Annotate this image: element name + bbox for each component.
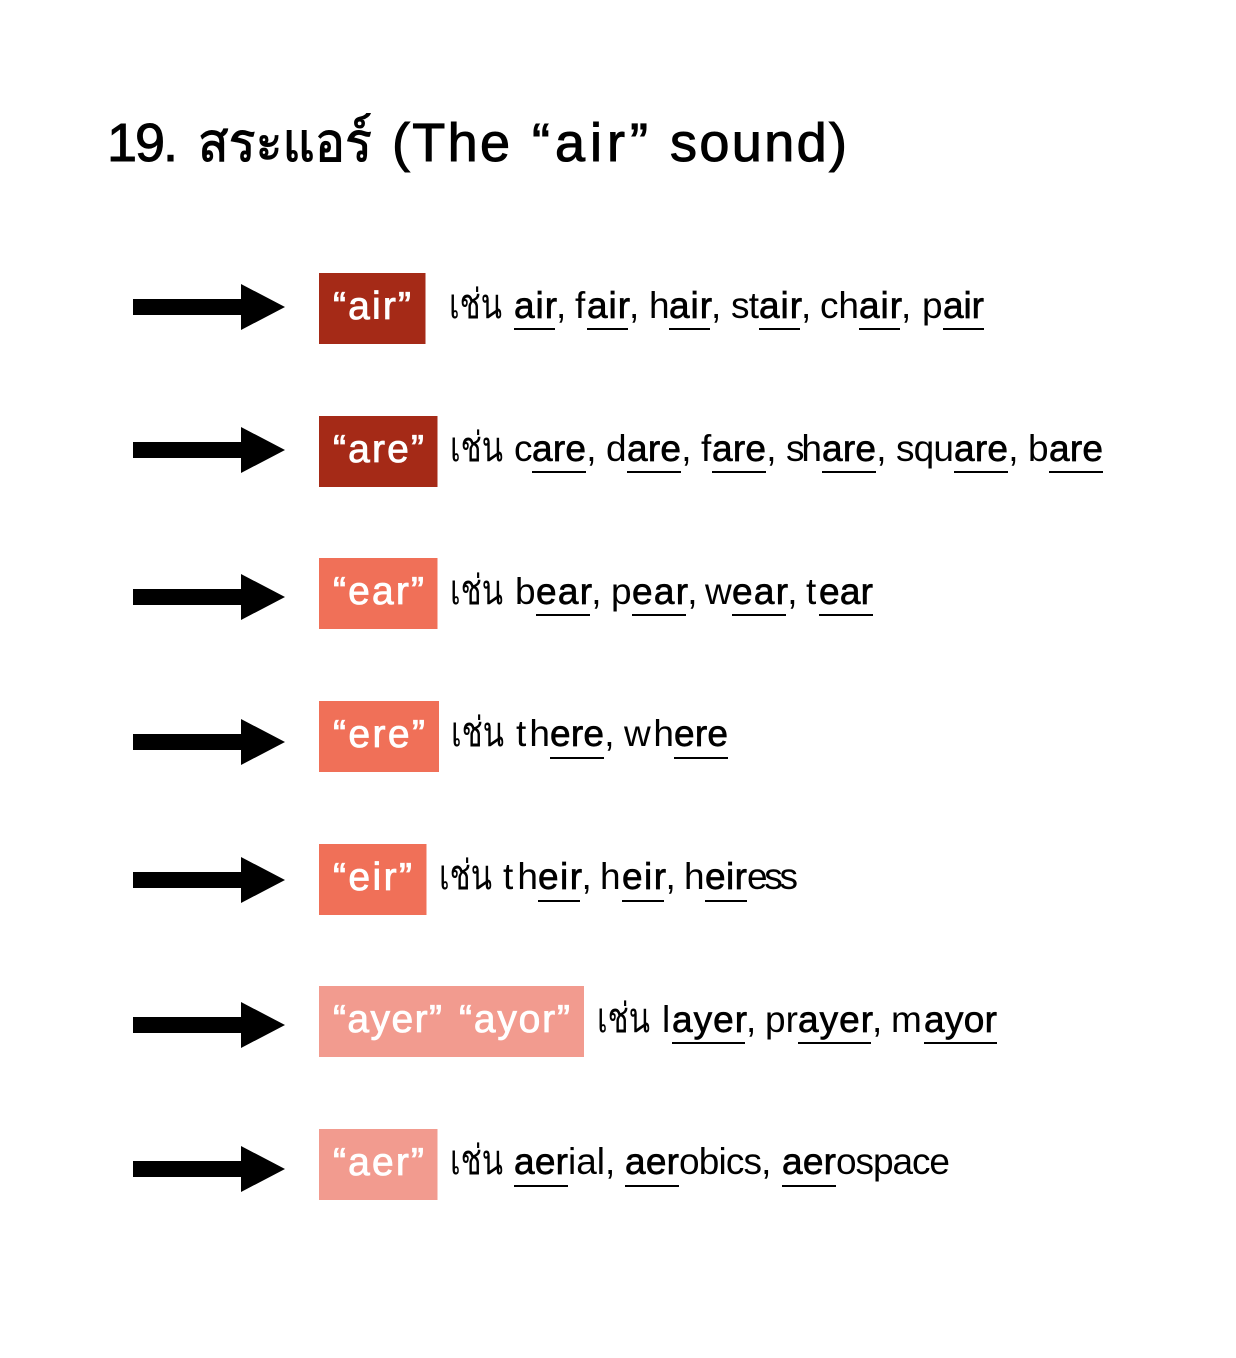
label: ayer ayor: “ayor” xyxy=(459,998,570,1041)
examples: air: air xyxy=(859,285,902,326)
examples: aer xyxy=(450,1137,950,1187)
examples: ear: , xyxy=(787,571,798,612)
examples: air: , xyxy=(801,285,811,326)
examples: ear: ear xyxy=(632,571,688,612)
row: ayer ayor xyxy=(133,986,997,1057)
examples: are: are xyxy=(532,428,586,469)
examples: air: f xyxy=(575,285,586,326)
examples: air: เช่น xyxy=(449,281,502,327)
examples: are: f xyxy=(701,428,712,469)
examples: ere xyxy=(451,709,728,759)
examples: ayer ayor: pr xyxy=(765,999,798,1040)
label: ere xyxy=(319,701,439,772)
examples: air: air xyxy=(759,285,802,326)
arrow: air xyxy=(133,284,285,330)
label: eir: “eir” xyxy=(333,856,412,899)
examples: are: b xyxy=(1028,428,1049,469)
examples: ere: เช่น xyxy=(451,709,504,755)
examples: aer: aer xyxy=(625,1141,679,1182)
examples: air: air xyxy=(514,285,557,326)
examples: ayer ayor: , xyxy=(746,999,756,1040)
examples: ayer ayor xyxy=(597,995,997,1044)
examples: air: , xyxy=(629,285,639,326)
examples: are: are xyxy=(822,428,876,469)
arrow: are xyxy=(133,427,285,473)
examples: air: p xyxy=(922,285,943,326)
examples: air xyxy=(449,281,984,330)
examples: ayer ayor: เช่น xyxy=(597,995,650,1041)
examples: eir: , xyxy=(665,856,676,897)
examples: ayer ayor: ayer xyxy=(672,999,747,1040)
label: ear xyxy=(319,558,438,629)
examples: are: squ xyxy=(896,428,954,469)
examples: aer: ospace xyxy=(836,1141,950,1182)
examples: are xyxy=(450,424,1103,473)
examples: are: c xyxy=(514,428,532,469)
examples: ear: เช่น xyxy=(450,567,503,613)
label: eir xyxy=(319,844,426,915)
examples: are: เช่น xyxy=(450,424,503,470)
label: air xyxy=(319,273,426,344)
row: air xyxy=(133,273,984,344)
examples: air: ch xyxy=(820,285,859,326)
examples: are: sh xyxy=(786,428,822,469)
examples: ear: ear xyxy=(536,571,592,612)
row: eir xyxy=(133,844,798,915)
examples: are: d xyxy=(606,428,627,469)
examples: are: are xyxy=(954,428,1008,469)
label: ayer ayor: “ayer” xyxy=(333,998,442,1041)
examples: are: , xyxy=(766,428,777,469)
arrow: eir xyxy=(133,857,285,903)
label: ear: “ear” xyxy=(333,570,424,613)
examples: ear: w xyxy=(704,571,732,612)
examples: air: h xyxy=(649,285,670,326)
examples: eir: h xyxy=(684,856,705,897)
arrow: ere xyxy=(133,719,285,765)
examples: aer: aer xyxy=(782,1141,836,1182)
row: are xyxy=(133,416,1103,487)
examples: ayer ayor: m xyxy=(891,999,922,1040)
examples: eir xyxy=(439,852,798,902)
examples: eir: ess xyxy=(747,856,798,897)
arrow: ayer ayor xyxy=(133,1002,285,1048)
examples: ear: ear xyxy=(819,571,873,612)
examples: eir: เช่น xyxy=(439,852,492,898)
examples: eir: eir xyxy=(538,856,582,897)
examples: air: , xyxy=(901,285,911,326)
label: aer xyxy=(319,1129,438,1200)
examples: aer: , xyxy=(761,1141,771,1182)
examples: ear: ear xyxy=(732,571,788,612)
examples: are: , xyxy=(586,428,597,469)
arrow: aer xyxy=(133,1146,285,1192)
title: สระแอร์ xyxy=(198,113,372,173)
examples: ere: , xyxy=(604,713,615,754)
examples: eir: th xyxy=(503,856,538,897)
row: aer xyxy=(133,1129,950,1200)
examples: air: air xyxy=(943,285,984,326)
title: sound) xyxy=(670,113,847,173)
examples: ayer ayor: ayer xyxy=(798,999,873,1040)
examples: are: , xyxy=(681,428,692,469)
row: ere xyxy=(133,701,728,772)
examples: are: , xyxy=(876,428,887,469)
label: air: “air” xyxy=(333,285,411,328)
title: “air” xyxy=(532,113,648,173)
title: (The xyxy=(392,113,510,173)
examples: ayer ayor: ayor xyxy=(924,999,997,1040)
examples: air: , xyxy=(556,285,566,326)
examples: ear: b xyxy=(515,571,536,612)
title: 19. xyxy=(107,113,178,173)
examples: eir: eir xyxy=(622,856,666,897)
examples: aer: เช่น xyxy=(450,1137,503,1183)
label: ayer ayor xyxy=(319,986,584,1057)
examples: aer: aer xyxy=(514,1141,568,1182)
examples: ere: th xyxy=(516,713,550,754)
examples: are: are xyxy=(1049,428,1103,469)
examples: ayer ayor: , xyxy=(872,999,882,1040)
examples: ere: ere xyxy=(550,713,604,754)
label: aer: “aer” xyxy=(333,1141,424,1184)
examples: air: air xyxy=(669,285,712,326)
examples: ear: t xyxy=(806,571,817,612)
examples: eir: h xyxy=(600,856,621,897)
examples: are: are xyxy=(627,428,681,469)
label: are xyxy=(319,416,438,487)
examples: air: , xyxy=(711,285,721,326)
label: ere: “ere” xyxy=(333,713,425,756)
examples: air: st xyxy=(731,285,760,326)
examples: eir: , xyxy=(581,856,592,897)
examples: ear: , xyxy=(591,571,602,612)
examples: are: , xyxy=(1008,428,1019,469)
examples: air: air xyxy=(587,285,630,326)
examples: ere: wh xyxy=(623,713,674,754)
examples: are: are xyxy=(712,428,766,469)
examples: aer: , xyxy=(605,1141,615,1182)
row: ear xyxy=(133,558,873,629)
examples: aer: obics xyxy=(679,1141,762,1182)
examples: ear: , xyxy=(687,571,698,612)
arrow: ear xyxy=(133,574,285,620)
label: are: “are” xyxy=(333,428,424,471)
examples: eir: eir xyxy=(705,856,747,897)
examples: ere: ere xyxy=(674,713,728,754)
examples: ear xyxy=(450,567,873,616)
examples: ear: p xyxy=(611,571,632,612)
examples: aer: ial xyxy=(568,1141,605,1182)
examples: ayer ayor: l xyxy=(662,999,670,1040)
